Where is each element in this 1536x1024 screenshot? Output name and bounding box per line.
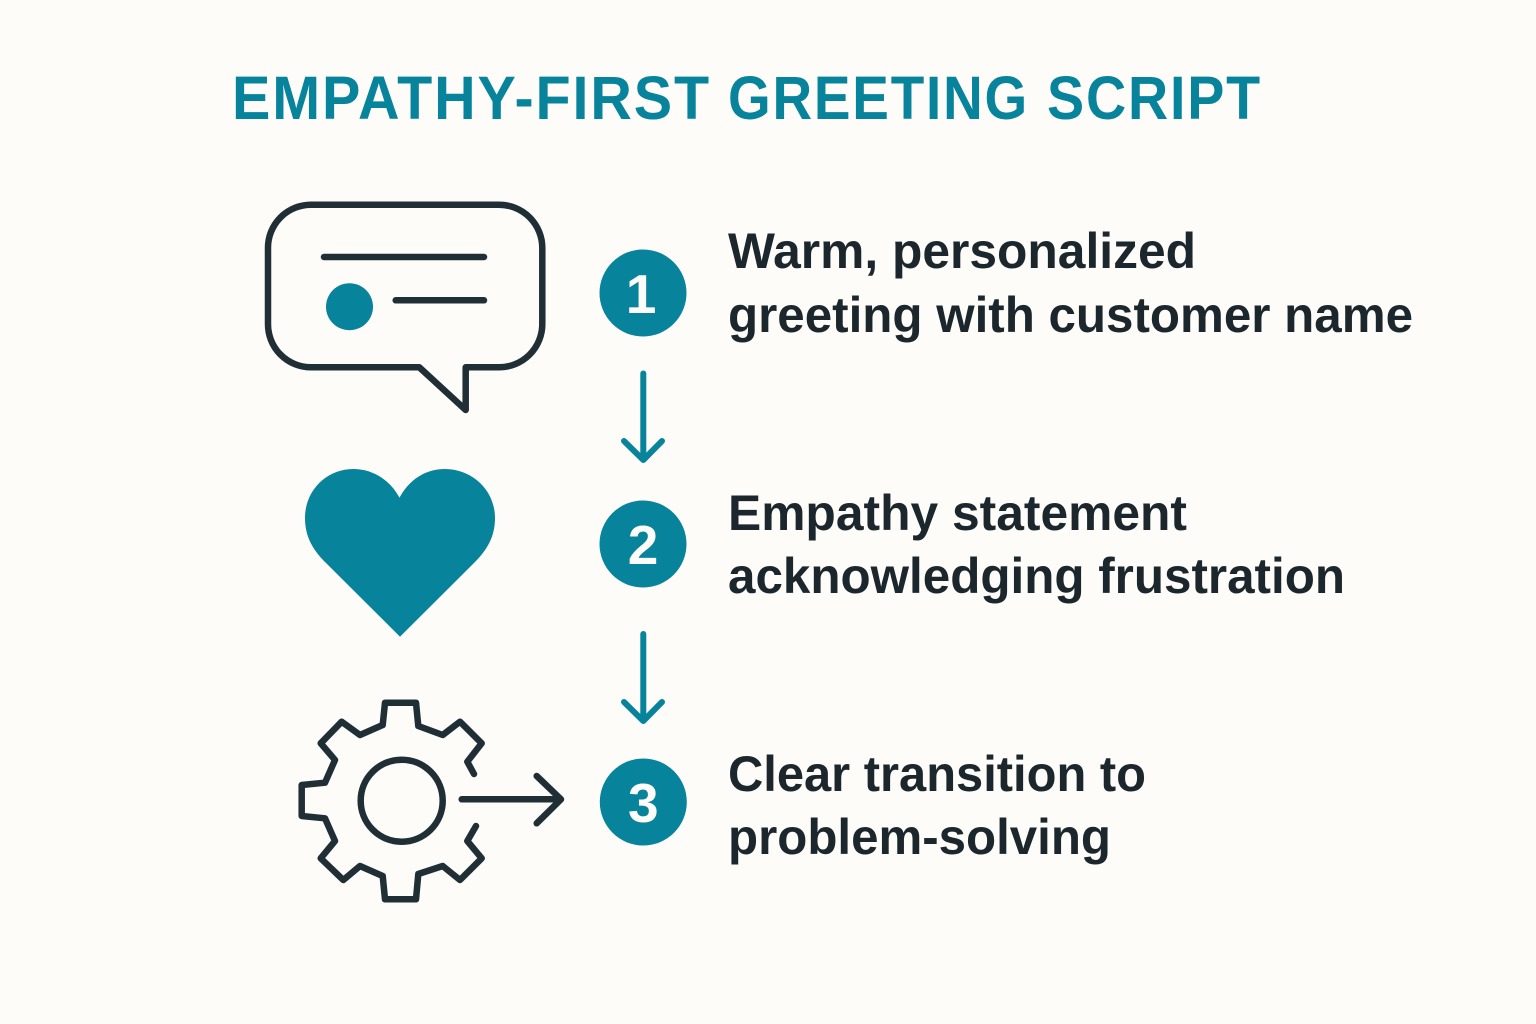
step 2 text	[728, 485, 1345, 604]
title: SCRIPT	[1047, 64, 1262, 132]
arrow: step 2 to step 3	[624, 634, 662, 721]
icon: gear with arrow	[302, 703, 561, 899]
step 1 text: greeting with customer name	[728, 287, 1413, 343]
icon: speech bubble	[268, 205, 542, 410]
step 2 text: Empathy statement	[728, 485, 1187, 541]
step 2 text: acknowledging frustration	[728, 548, 1345, 604]
step 1 text	[728, 223, 1413, 343]
title: GREETING	[728, 64, 1029, 132]
step 2 badge	[600, 500, 686, 588]
step 3 badge	[600, 758, 687, 846]
step 1 text: Warm, personalized	[728, 223, 1196, 279]
title	[232, 64, 1262, 132]
step 3 text: problem-solving	[728, 809, 1111, 865]
step 2 badge: 2	[628, 514, 658, 576]
step 3 text: Clear transition to	[728, 746, 1146, 802]
icon: heart	[305, 469, 495, 637]
step 3 badge: 3	[628, 772, 659, 834]
step 1 badge	[600, 250, 686, 336]
arrow: step 1 to step 2	[624, 374, 662, 460]
title: EMPATHY-FIRST	[232, 64, 711, 132]
step 3 text	[728, 746, 1146, 865]
step 1 badge: 1	[626, 263, 656, 325]
